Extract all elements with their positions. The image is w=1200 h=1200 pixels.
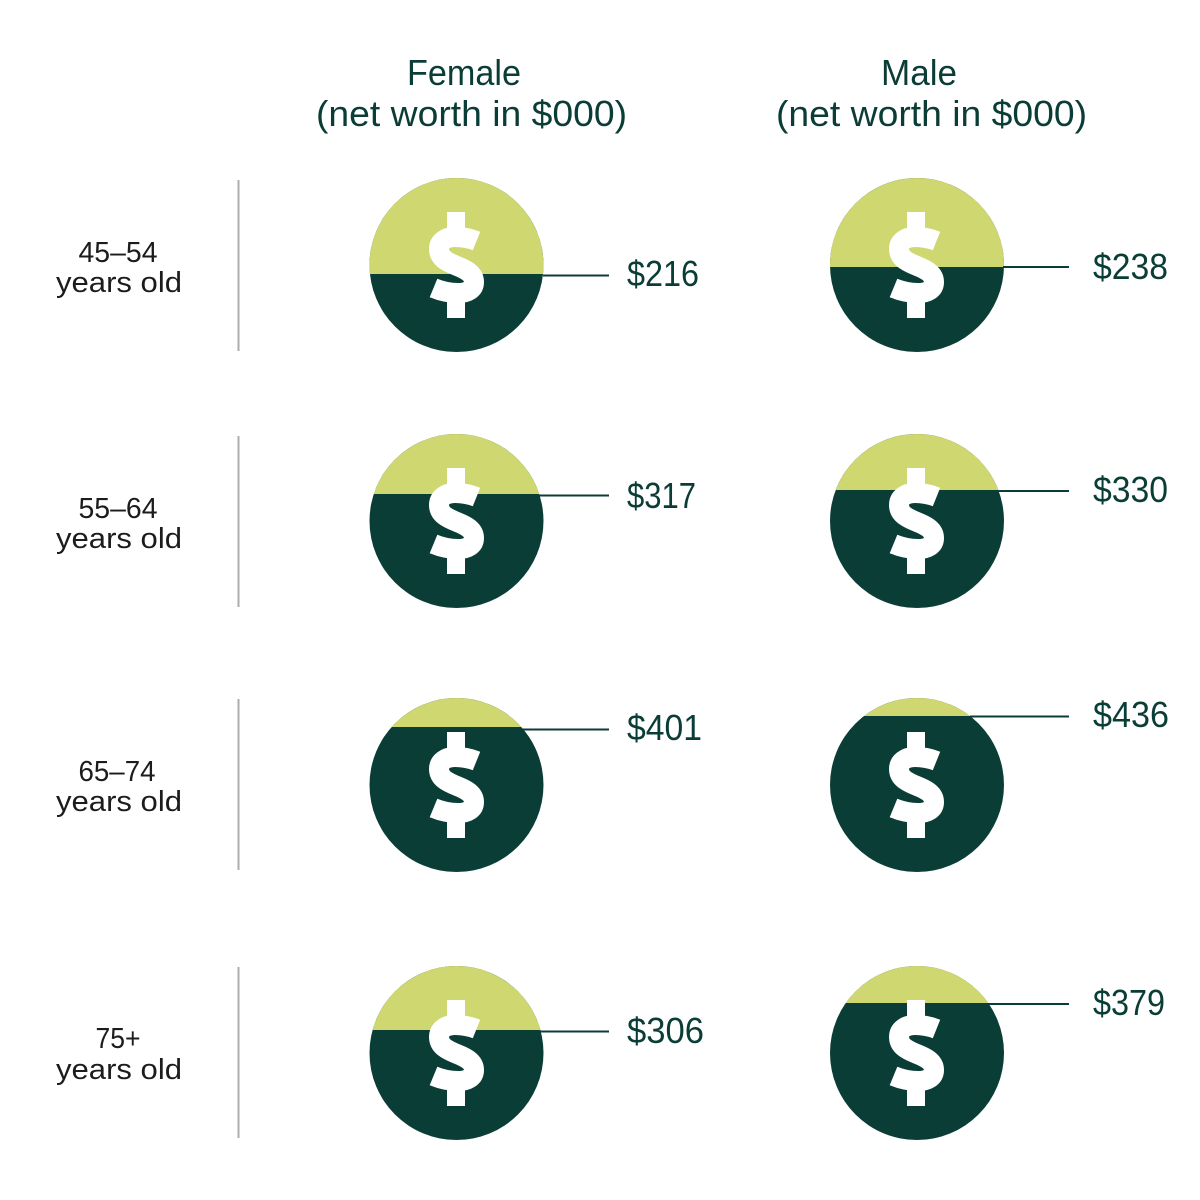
icon: female 45–54 coin bbox=[370, 178, 544, 352]
row label: 75+ years old: years old bbox=[56, 1054, 182, 1086]
row label: 65–74 years old: 65–74 bbox=[78, 756, 156, 788]
row label: 45–54 years old: years old bbox=[56, 267, 182, 299]
row label: 45–54 years old: 45–54 bbox=[78, 237, 158, 269]
row label: 45–54 years old bbox=[56, 180, 238, 351]
value: male 55–64: $330 bbox=[1093, 469, 1168, 510]
icon: male 75+ coin bbox=[830, 966, 1004, 1140]
icon: male 45–54 coin bbox=[830, 178, 1004, 352]
row label: 55–64 years old bbox=[56, 436, 238, 607]
value: female 45–54: $216 bbox=[627, 253, 699, 294]
heading: male column: Male bbox=[881, 52, 957, 93]
value: female 75+: $306 bbox=[627, 1010, 704, 1051]
row label: 75+ years old bbox=[56, 967, 238, 1138]
icon: female 75+ coin bbox=[370, 966, 544, 1140]
heading: female column: (net worth in $000) bbox=[316, 93, 627, 134]
value: male 75+: $379 bbox=[1093, 982, 1165, 1023]
icon: female 55–64 coin bbox=[370, 434, 544, 608]
heading: female column: Female bbox=[407, 52, 521, 93]
row label: 65–74 years old: years old bbox=[56, 786, 182, 818]
row label: 55–64 years old: years old bbox=[56, 523, 182, 555]
value: female 55–64: $317 bbox=[627, 475, 696, 516]
row label: 65–74 years old bbox=[56, 699, 238, 870]
icon: female 65–74 coin bbox=[370, 698, 544, 872]
value: male 65–74: $436 bbox=[1093, 694, 1169, 735]
icon: male 65–74 coin bbox=[830, 698, 1004, 872]
heading: male column: (net worth in $000) bbox=[776, 93, 1087, 134]
icon: male 55–64 coin bbox=[830, 434, 1004, 608]
heading: male column bbox=[776, 52, 1087, 134]
value: male 45–54: $238 bbox=[1093, 246, 1168, 287]
row label: 75+ years old: 75+ bbox=[96, 1023, 140, 1055]
row label: 55–64 years old: 55–64 bbox=[78, 493, 158, 525]
heading: female column bbox=[316, 52, 627, 134]
value: female 65–74: $401 bbox=[627, 707, 702, 748]
